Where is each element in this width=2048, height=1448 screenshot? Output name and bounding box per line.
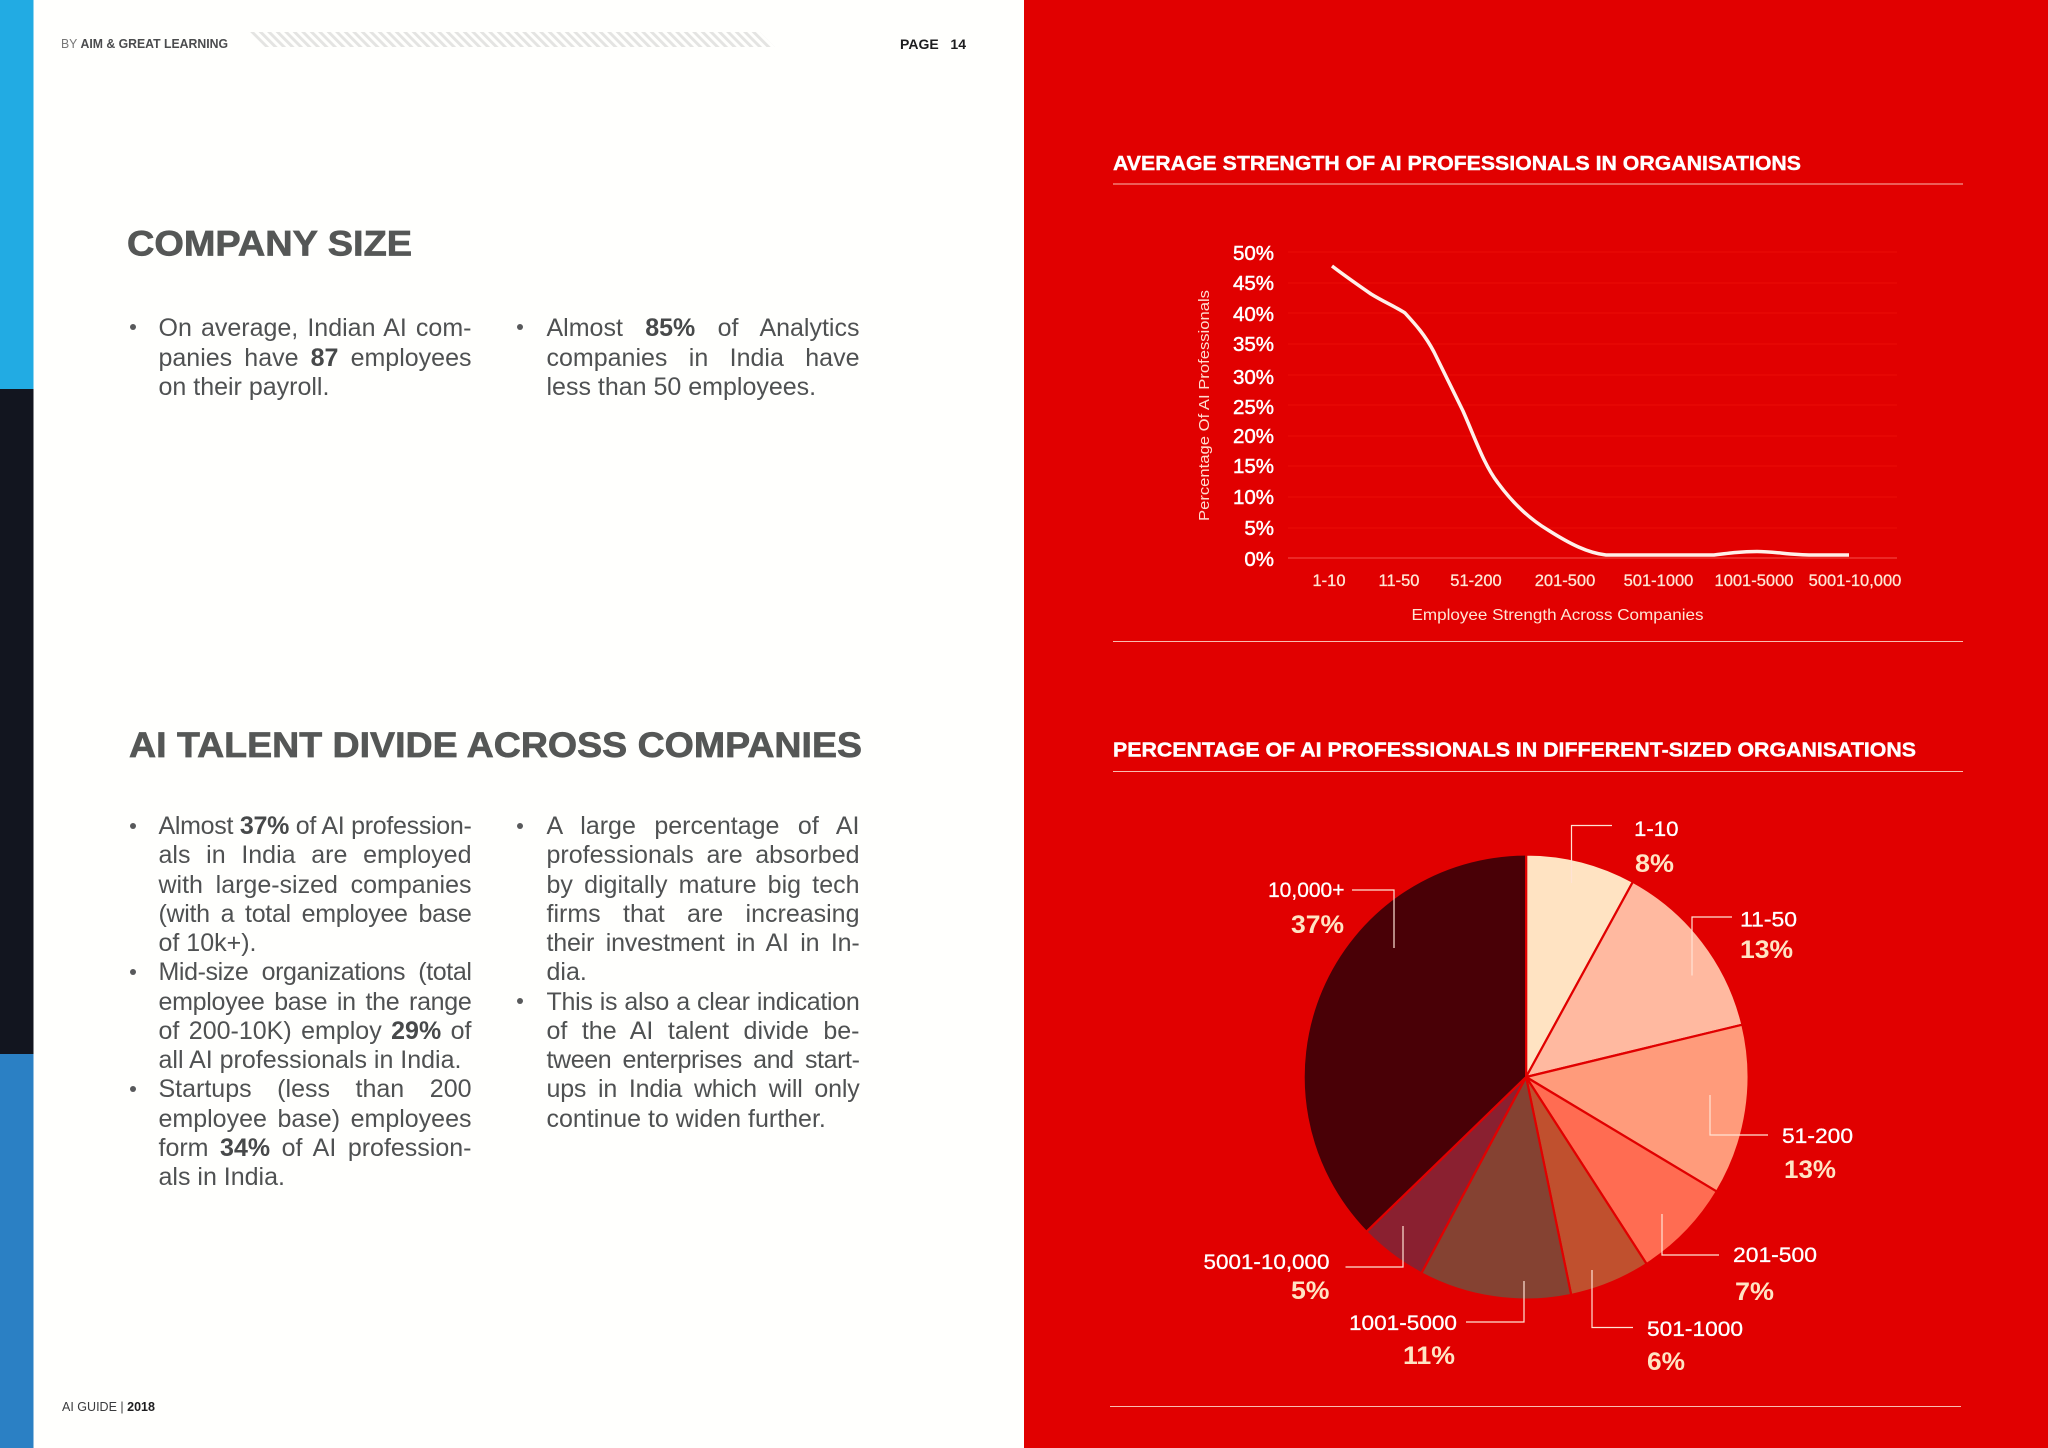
y axis labels: 50% bbox=[1233, 242, 1274, 265]
text block: talent divide bullets: firms that are increasing bbox=[546, 900, 860, 928]
callout: 201-500: 201-500 bbox=[1733, 1244, 1817, 1267]
callout: 501-1000: 501-1000 bbox=[1647, 1318, 1743, 1341]
text block: talent divide bullets: of the AI talent divide be- bbox=[546, 1017, 860, 1045]
text block: talent divide bullets: als in India. bbox=[158, 1163, 285, 1191]
pie chart title: PERCENTAGE OF AI PROFESSIONALS IN DIFFERENT-SIZED ORGANISATIONS bbox=[1113, 740, 1916, 762]
text block: company size bullets: companies in India have bbox=[546, 344, 860, 372]
callout: 5001-10,000 bbox=[1204, 1226, 1403, 1305]
callout: 501-1000 bbox=[1592, 1270, 1743, 1376]
x axis labels: 5001-10,000 bbox=[1809, 572, 1901, 590]
x axis labels: 501-1000 bbox=[1624, 572, 1693, 590]
y axis labels: 0% bbox=[1244, 548, 1274, 571]
callout: 11-50 bbox=[1692, 908, 1797, 976]
x axis labels: 201-500 bbox=[1535, 572, 1595, 590]
callout: 1001-5000: 1001-5000 bbox=[1349, 1312, 1457, 1335]
text block: company size bullets: less than 50 employees. bbox=[546, 373, 816, 401]
x axis labels: 1-10 bbox=[1312, 572, 1346, 590]
text block: company size bullets: on their payroll. bbox=[158, 373, 329, 401]
callout: 5001-10,000: 5% bbox=[1291, 1277, 1330, 1305]
left colour strip bbox=[0, 0, 34, 1448]
heading: AI talent divide: AI TALENT DIVIDE ACROSS COMPANIES bbox=[129, 726, 862, 765]
text block: talent divide bullets: all AI professionals in India. bbox=[158, 1046, 461, 1074]
panel: red background bbox=[1024, 0, 2048, 1448]
y axis labels: 15% bbox=[1233, 455, 1274, 478]
text block: talent divide bullets: their investment in AI in In- bbox=[546, 929, 860, 957]
header stripe band bbox=[250, 32, 775, 47]
text block: company size bullets: On average, Indian AI com- bbox=[158, 314, 472, 342]
footer: AI GUIDE | 2018 bbox=[62, 1400, 155, 1414]
callout: 201-500: 7% bbox=[1735, 1278, 1774, 1306]
callout: 1-10: 8% bbox=[1635, 850, 1674, 878]
callout: 51-200: 13% bbox=[1784, 1156, 1836, 1184]
y axis labels: 40% bbox=[1233, 303, 1274, 326]
y axis labels: 45% bbox=[1233, 272, 1274, 295]
callout: 10,000+ bbox=[1268, 879, 1394, 948]
y axis labels: 5% bbox=[1244, 517, 1274, 540]
text block: talent divide bullets: tween enterprises and start- bbox=[546, 1046, 860, 1074]
y axis labels: 30% bbox=[1233, 366, 1274, 389]
header byline: BY AIM & GREAT LEARNING bbox=[61, 36, 228, 51]
line chart bbox=[1196, 242, 1901, 624]
y axis labels bbox=[1233, 242, 1274, 571]
callout: 1001-5000 bbox=[1349, 1281, 1524, 1370]
x axis labels: 51-200 bbox=[1450, 572, 1502, 590]
text block: talent divide bullets: dia. bbox=[546, 958, 587, 986]
text block: talent divide bullets: A large percentage of AI bbox=[546, 812, 860, 840]
text block: talent divide bullets: of 200-10K) employ 29% of bbox=[158, 1017, 472, 1045]
text block: talent divide bullets: employee base in the range bbox=[158, 988, 472, 1016]
callout: 10,000+: 37% bbox=[1291, 911, 1344, 939]
y axis labels: 10% bbox=[1233, 486, 1274, 509]
text block: talent divide bullets: with large-sized companies bbox=[158, 870, 472, 898]
line chart title: AVERAGE STRENGTH OF AI PROFESSIONALS IN ORGANISATIONS bbox=[1113, 153, 1801, 175]
callout: 1-10: 1-10 bbox=[1634, 818, 1678, 841]
text block: company size bullets: Almost 85% of Analytics bbox=[546, 314, 860, 342]
text block: talent divide bullets: of 10k+). bbox=[158, 929, 256, 957]
y axis title: Percentage Of AI Professionals bbox=[1196, 290, 1213, 521]
y axis labels: 20% bbox=[1233, 425, 1274, 448]
callout: 11-50: 13% bbox=[1740, 936, 1793, 964]
callout: 5001-10,000: 5001-10,000 bbox=[1204, 1251, 1330, 1274]
text block: talent divide bullets bbox=[130, 812, 860, 1191]
text block: company size bullets: panies have 87 employees bbox=[158, 344, 471, 372]
text block: talent divide bullets: Mid-size organizations (total bbox=[158, 958, 472, 986]
text block: company size bullets bbox=[130, 314, 860, 401]
heading: company size: COMPANY SIZE bbox=[127, 224, 412, 264]
text block: talent divide bullets: Almost 37% of AI profession- bbox=[158, 812, 472, 840]
x axis labels bbox=[1312, 572, 1901, 590]
text block: talent divide bullets: (with a total employee base bbox=[158, 900, 472, 928]
text block: talent divide bullets: form 34% of AI profession- bbox=[158, 1134, 471, 1162]
pie chart bbox=[1304, 854, 1749, 1300]
text block: talent divide bullets: als in India are employed bbox=[158, 841, 472, 869]
callout: 1-10 bbox=[1572, 818, 1678, 883]
text block: talent divide bullets: employee base) employees bbox=[158, 1104, 472, 1132]
text block: talent divide bullets: by digitally mature big tech bbox=[546, 870, 860, 898]
page number: PAGE 14 bbox=[900, 36, 966, 52]
callout: 51-200 bbox=[1710, 1095, 1853, 1184]
callout: 51-200: 51-200 bbox=[1782, 1125, 1853, 1148]
callout: 201-500 bbox=[1662, 1214, 1817, 1306]
text block: talent divide bullets: continue to widen further. bbox=[546, 1104, 826, 1132]
rules bbox=[1110, 184, 1963, 1406]
y axis labels: 25% bbox=[1233, 396, 1274, 419]
text block: talent divide bullets: ups in India which will only bbox=[546, 1075, 860, 1103]
x axis labels: 1001-5000 bbox=[1715, 572, 1793, 590]
x axis labels: 11-50 bbox=[1379, 572, 1419, 590]
x axis title: Employee Strength Across Companies bbox=[1412, 607, 1704, 624]
text block: talent divide bullets: This is also a clear indication bbox=[546, 988, 860, 1016]
text block: talent divide bullets: Startups (less than 200 bbox=[158, 1075, 472, 1103]
data line bbox=[1332, 266, 1849, 555]
callout: 1001-5000: 11% bbox=[1403, 1342, 1455, 1370]
y axis labels: 35% bbox=[1233, 333, 1274, 356]
callout: 501-1000: 6% bbox=[1647, 1348, 1685, 1376]
text block: talent divide bullets: professionals are absorbed bbox=[546, 841, 860, 869]
callout: 10,000+: 10,000+ bbox=[1268, 879, 1344, 902]
callout: 11-50: 11-50 bbox=[1740, 908, 1797, 932]
